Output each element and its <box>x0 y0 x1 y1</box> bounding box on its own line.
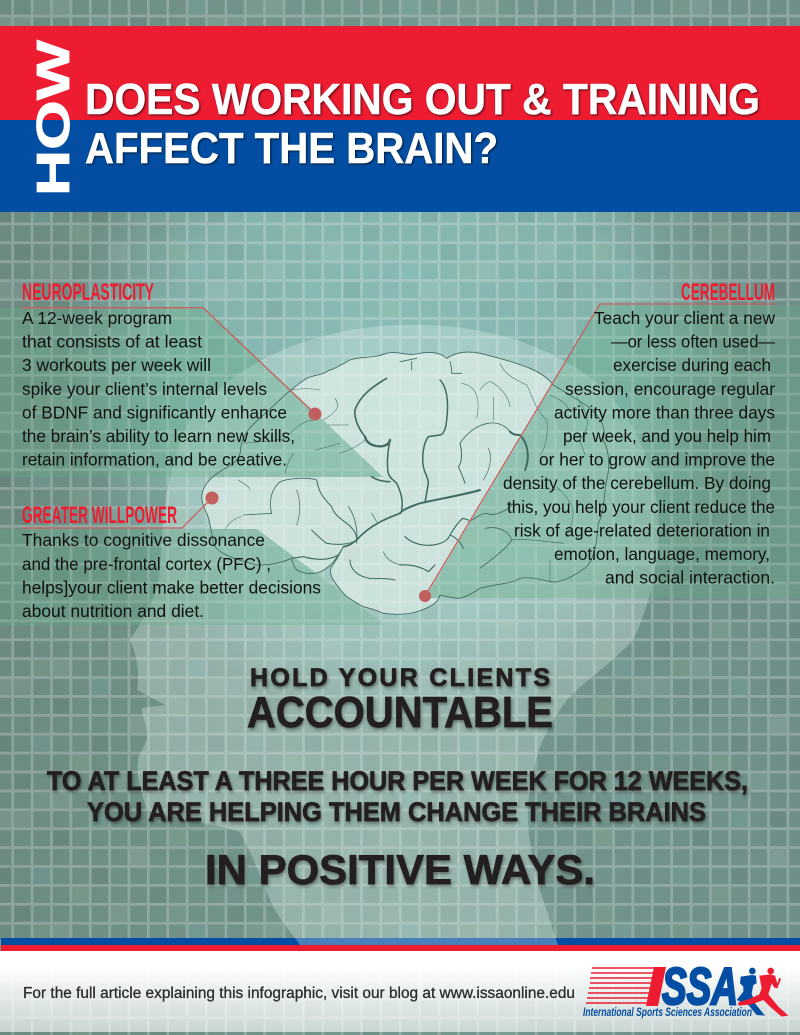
text block: greater willpower <box>22 530 321 621</box>
text block: cerebellum: and social interaction. <box>605 568 775 588</box>
logo: ISSA <box>583 958 788 1019</box>
logo red bar <box>646 967 666 1006</box>
text block: cerebellum: activity more than three days <box>554 402 775 422</box>
major sulci <box>243 358 563 580</box>
title line one: DOES WORKING OUT & TRAINING <box>85 75 760 124</box>
text block: neuroplasticity: of BDNF and significantly enhance <box>22 402 287 422</box>
text block: cerebellum: or her to grow and improve the <box>539 450 775 470</box>
fine sulci <box>225 363 587 582</box>
blue band <box>0 120 800 212</box>
text block: cerebellum: emotion, language, memory, <box>554 544 770 564</box>
stripe: red footer band <box>1 945 800 951</box>
title line two: AFFECT THE BRAIN? <box>85 124 498 173</box>
callout line: accountable: ACCOUNTABLE <box>247 688 553 737</box>
brain fill <box>202 352 552 614</box>
text block: neuroplasticity: retain information, and be creative. <box>22 450 287 470</box>
stripe: blue footer band <box>1 938 800 945</box>
text block: greater willpower: about nutrition and diet. <box>22 601 204 621</box>
text block: cerebellum: this, you help your client reduce the <box>507 497 775 517</box>
text block: greater willpower: Thanks to cognitive dissonance <box>22 530 265 550</box>
pointer: greater willpower <box>22 492 218 528</box>
text block: cerebellum: exercise during each <box>613 355 771 375</box>
pointer: cerebellum <box>419 304 775 602</box>
brain illustration <box>202 352 609 614</box>
text block: cerebellum: risk of age-related deterioration in <box>514 520 770 540</box>
logo letters: SSA <box>662 958 738 1016</box>
text block: cerebellum <box>503 308 776 588</box>
header banner <box>0 26 800 212</box>
red band <box>0 26 800 120</box>
text block: neuroplasticity <box>22 308 295 470</box>
callout line: three hours per week: TO AT LEAST A THREE HOUR PER WEEK FOR 12 WEEKS, <box>47 766 748 796</box>
text block: cerebellum: density of the cerebellum. By doing <box>503 473 771 493</box>
rotated word how: HOW <box>27 39 79 196</box>
footer link text: For the full article explaining this infographic, visit our blog at www.issaonline.edu <box>23 985 575 1002</box>
text block: neuroplasticity: A 12-week program <box>22 308 172 328</box>
heading: greater willpower: GREATER WILLPOWER <box>22 502 177 529</box>
logo blue runner <box>737 968 765 1016</box>
logo speed stripes <box>586 968 654 1003</box>
callout line: in positive ways: IN POSITIVE WAYS. <box>205 846 595 893</box>
text block: greater willpower: and the pre-frontal cortex (PFC) , <box>22 554 271 574</box>
text block: neuroplasticity: the brain’s ability to learn new skills, <box>22 426 295 446</box>
text block: neuroplasticity: that consists of at least <box>22 332 202 352</box>
footer panel <box>0 951 800 1032</box>
brain outline <box>202 352 609 614</box>
green panel tints <box>0 305 800 625</box>
text block: cerebellum: session, encourage regular <box>565 379 775 399</box>
text block: cerebellum: —or less often used— <box>611 332 776 352</box>
heading: neuroplasticity: NEUROPLASTICITY <box>22 279 154 306</box>
text block: cerebellum: Teach your client a new <box>594 308 775 328</box>
callout line: change their brains: YOU ARE HELPING THEM CHANGE THEIR BRAINS <box>87 797 706 827</box>
pointer: neuroplasticity <box>22 308 322 420</box>
callout line: hold your clients: HOLD YOUR CLIENTS <box>250 664 550 692</box>
head silhouette <box>130 325 659 945</box>
text block: greater willpower: helps]your client make better decisions <box>22 578 321 598</box>
text block: neuroplasticity: 3 workouts per week will <box>22 355 211 375</box>
text block: cerebellum: per week, and you help him <box>563 426 771 446</box>
text block: neuroplasticity: spike your client’s internal levels <box>22 379 267 399</box>
callout: hold your clients accountable <box>47 664 748 893</box>
logo red runner <box>738 968 788 1017</box>
